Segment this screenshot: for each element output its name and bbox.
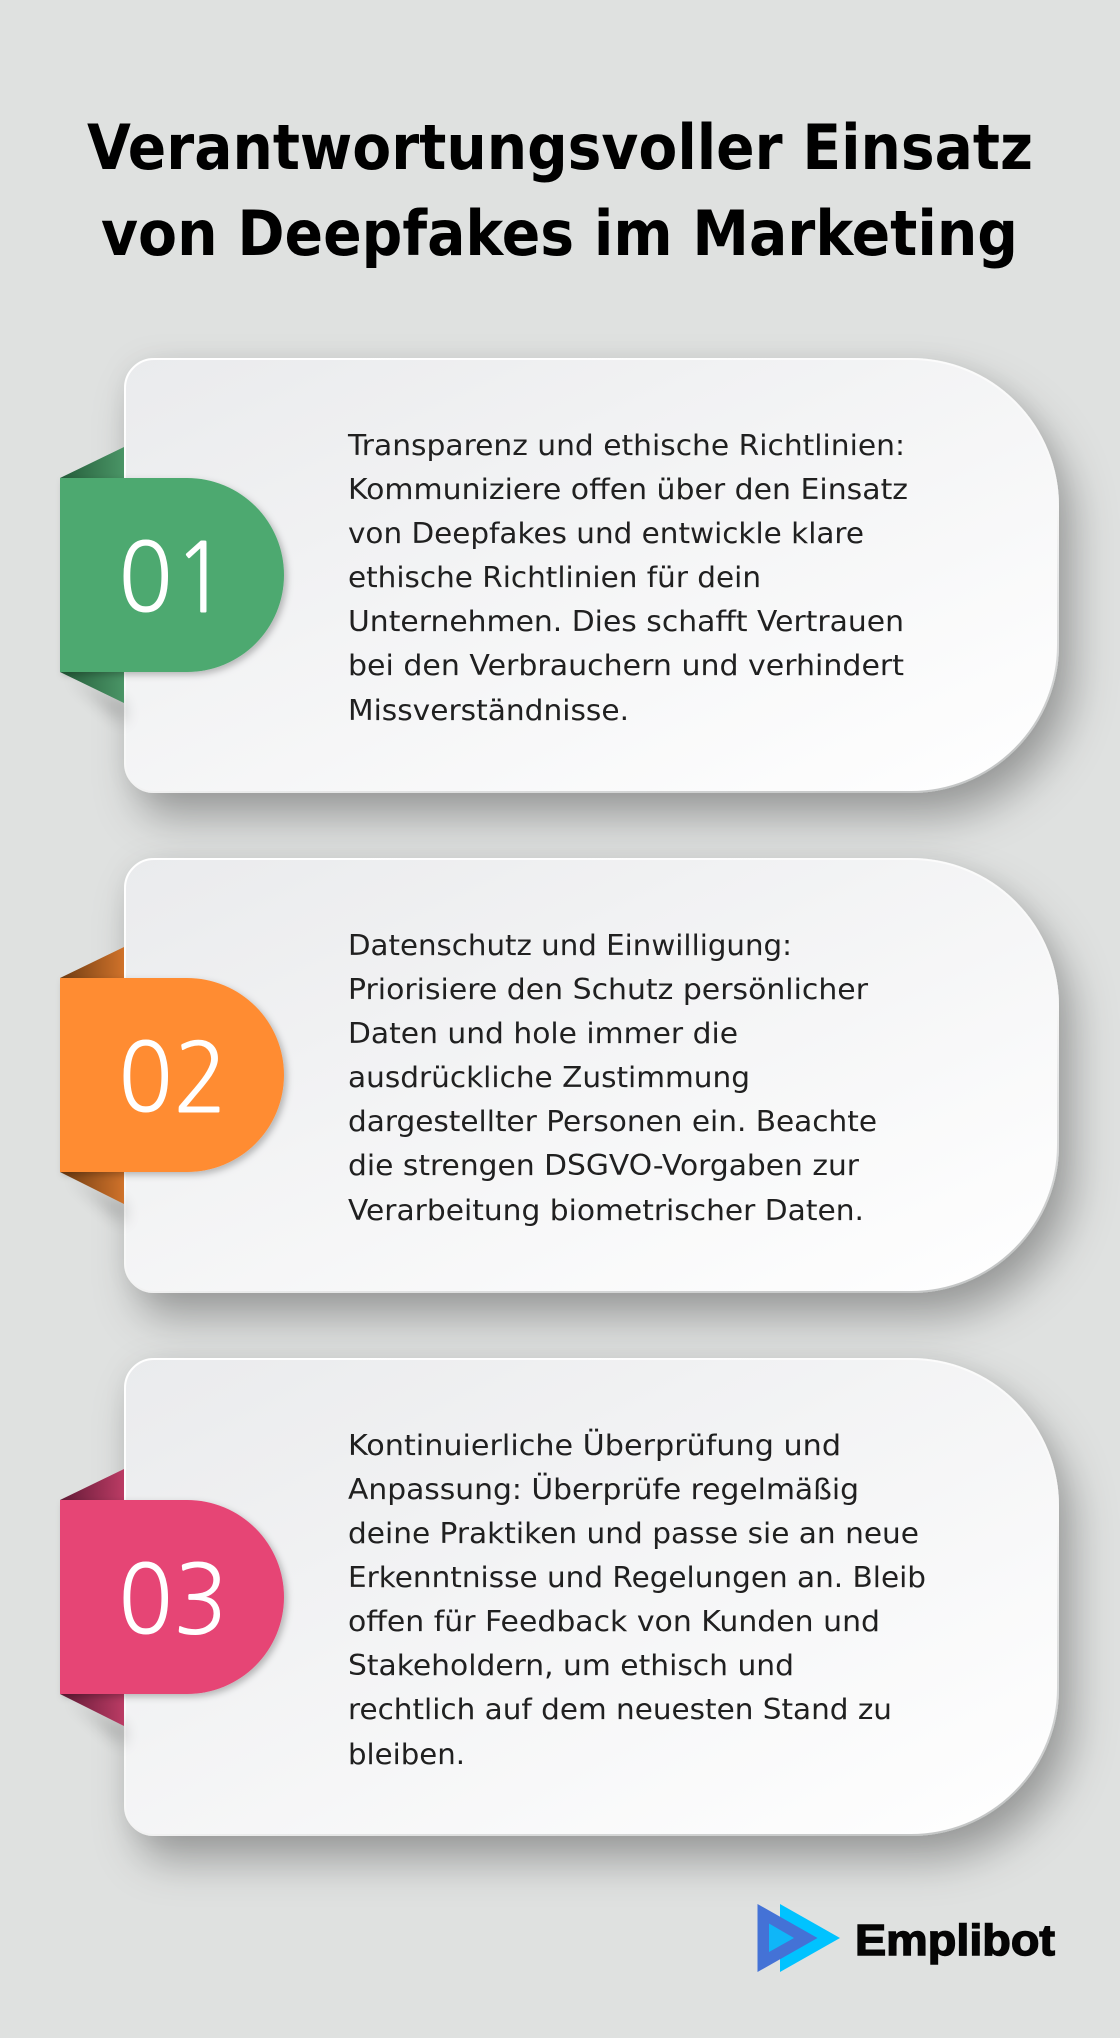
text block 3: Kontinuierliche Überprüfung und: [348, 1428, 841, 1462]
ribbon fold bottom 2: [60, 1172, 124, 1204]
ribbon shadow 1: [70, 676, 124, 724]
title: [87, 111, 1033, 270]
logo: Emplibot: [758, 1904, 1055, 1972]
text block 3: rechtlich auf dem neuesten Stand zu: [348, 1692, 892, 1726]
text block 1: Kommuniziere offen über den Einsatz: [348, 472, 908, 506]
card body 3: [125, 1359, 1058, 1835]
text block 2: Verarbeitung biometrischer Daten.: [348, 1193, 864, 1227]
text block 2: [348, 928, 877, 1227]
text block 1: Transparenz und ethische Richtlinien:: [347, 428, 905, 462]
text block 2: Datenschutz und Einwilligung:: [348, 928, 792, 962]
ribbon fold top 2: [60, 947, 124, 978]
ribbon shadow 3: [70, 1698, 124, 1746]
panel: step 3: [60, 1359, 1058, 1835]
number badge 1: [60, 478, 284, 672]
number 02: 02: [118, 1030, 228, 1126]
logo wordmark: Emplibot: [855, 1916, 1055, 1965]
icon: play triangles: [758, 1904, 840, 1972]
text block 1: Unternehmen. Dies schafft Vertrauen: [348, 604, 904, 638]
text block 3: Anpassung: Überprüfe regelmäßig: [348, 1472, 859, 1506]
number badge 3: [60, 1500, 284, 1694]
ribbon fold top 1: [60, 447, 124, 478]
card body 2: [125, 859, 1058, 1292]
text block 1: [347, 428, 908, 727]
text block 3: Erkenntnisse und Regelungen an. Bleib: [348, 1560, 926, 1594]
panel: step 1: [60, 359, 1058, 792]
text block 1: Missverständnisse.: [348, 693, 629, 727]
number 03: 03: [118, 1552, 228, 1648]
number badge 2: [60, 978, 284, 1172]
ribbon fold bottom 3: [60, 1694, 124, 1726]
text block 3: Stakeholdern, um ethisch und: [348, 1648, 794, 1682]
text block 2: Priorisiere den Schutz persönlicher: [348, 972, 868, 1006]
text block 1: von Deepfakes und entwickle klare: [348, 516, 864, 550]
text block 2: Daten und hole immer die: [348, 1016, 738, 1050]
text block 2: ausdrückliche Zustimmung: [348, 1060, 750, 1094]
text block 3: bleiben.: [348, 1737, 465, 1771]
text block 1: bei den Verbrauchern und verhindert: [348, 648, 904, 682]
ribbon fold bottom 1: [60, 672, 124, 703]
title: von Deepfakes im Marketing: [101, 197, 1018, 270]
ribbon shadow 2: [70, 1176, 124, 1224]
text block 3: [348, 1428, 926, 1771]
text block 3: deine Praktiken und passe sie an neue: [348, 1516, 919, 1550]
number 01: 01: [118, 530, 228, 626]
text block 1: ethische Richtlinien für dein: [348, 560, 761, 594]
text block 2: die strengen DSGVO-Vorgaben zur: [348, 1148, 859, 1182]
panel: step 2: [60, 859, 1058, 1292]
title: Verantwortungsvoller Einsatz: [87, 111, 1033, 184]
card body 1: [125, 359, 1058, 792]
text block 3: offen für Feedback von Kunden und: [348, 1604, 880, 1638]
ribbon fold top 3: [60, 1469, 124, 1500]
text block 2: dargestellter Personen ein. Beachte: [348, 1104, 877, 1138]
